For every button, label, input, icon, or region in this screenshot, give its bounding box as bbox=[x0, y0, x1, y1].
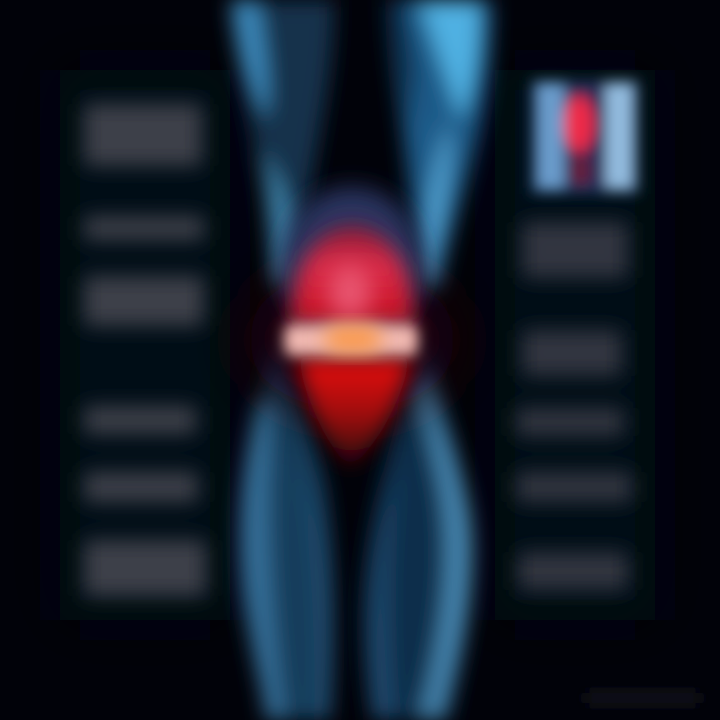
footer mark bbox=[585, 692, 700, 704]
lower bone red bbox=[298, 358, 410, 468]
upper right leg strands bbox=[385, 0, 492, 290]
lower left leg strands bbox=[238, 350, 334, 720]
right text column bbox=[516, 222, 632, 590]
text block 2 bbox=[84, 216, 204, 240]
text block 5 bbox=[84, 472, 198, 502]
text block 7 bbox=[522, 222, 628, 278]
text block 6 bbox=[84, 540, 206, 596]
text block 3 bbox=[84, 276, 204, 326]
text block 10 bbox=[516, 472, 632, 502]
upper bone red bbox=[292, 226, 413, 325]
pink highlight bbox=[328, 264, 372, 320]
side panels glow bbox=[60, 70, 655, 620]
text block 1 bbox=[84, 104, 202, 166]
icon: knee thumbnail bbox=[530, 80, 640, 194]
text block 8 bbox=[522, 330, 622, 376]
knee capsule outline bbox=[282, 187, 422, 343]
left text column bbox=[84, 104, 206, 596]
knee joint bbox=[284, 226, 418, 468]
text block 4 bbox=[84, 406, 196, 434]
upper left leg strands bbox=[230, 0, 334, 290]
knee red glow bbox=[247, 270, 457, 410]
lower right leg strands bbox=[362, 350, 473, 720]
band centre bbox=[326, 326, 380, 352]
text block 9 bbox=[516, 408, 624, 436]
joint band bbox=[284, 324, 418, 356]
text block 11 bbox=[518, 552, 628, 590]
